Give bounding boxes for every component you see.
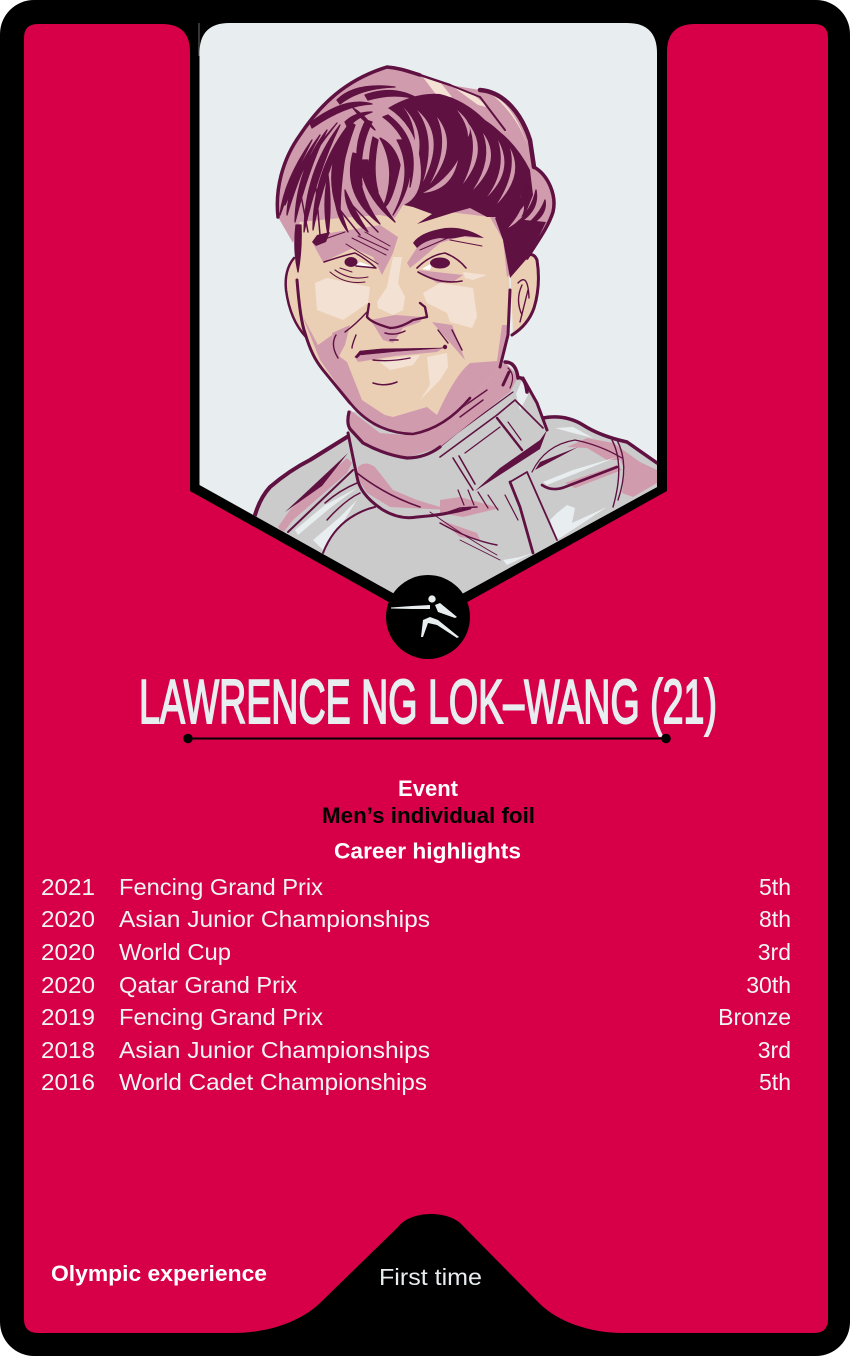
career highlights table: 2020: [41, 906, 95, 932]
right eyebrow: [413, 228, 484, 248]
neck and collar: [348, 362, 527, 458]
career highlights table: 5th: [759, 874, 791, 900]
event heading: Event: [398, 776, 459, 801]
career highlights table: Bronze: [718, 1004, 791, 1030]
face shading: [302, 316, 384, 428]
hair: [277, 67, 554, 278]
career highlights table: Fencing Grand Prix: [119, 874, 324, 900]
career highlights heading: Career highlights: [334, 838, 521, 864]
career highlights table: 2018: [41, 1037, 95, 1063]
hair dark mass: [388, 94, 533, 225]
fencer figure: [391, 595, 459, 638]
career highlights table: 3rd: [758, 939, 791, 965]
event name: Men’s individual foil: [322, 803, 535, 828]
career highlights table: World Cup: [119, 939, 231, 965]
career highlights table: 2016: [41, 1069, 95, 1095]
career highlights table: Fencing Grand Prix: [119, 1004, 324, 1030]
career highlights table: 2020: [41, 972, 95, 998]
smile lines: [333, 312, 462, 358]
portrait illustration: [230, 67, 657, 620]
icon: fencer badge: [386, 575, 470, 659]
left eyebrow: [312, 232, 330, 246]
ear: [286, 253, 539, 337]
hair light slivers: [403, 103, 524, 228]
career highlights table: 2021: [41, 874, 95, 900]
left eye: [324, 253, 377, 283]
career highlights table: 3rd: [758, 1037, 791, 1063]
career highlights table: Qatar Grand Prix: [119, 972, 298, 998]
career highlights table: [41, 874, 791, 1095]
career highlights table: 8th: [759, 906, 791, 932]
nose: [367, 303, 427, 328]
career highlights table: 30th: [746, 972, 791, 998]
olympic experience value: First time: [379, 1264, 482, 1290]
hair strands: [280, 86, 545, 272]
face outline: [297, 280, 350, 403]
suit lines: [255, 437, 347, 515]
portrait panel: [199, 23, 657, 620]
career highlights table: 2020: [41, 939, 95, 965]
face: [297, 190, 510, 435]
olympic experience label: Olympic experience: [51, 1261, 267, 1286]
career highlights table: Asian Junior Championships: [119, 1037, 430, 1063]
career highlights table: 2019: [41, 1004, 95, 1030]
career highlights table: World Cadet Championships: [119, 1069, 427, 1095]
fencing suit: [253, 364, 657, 594]
right eye: [417, 253, 466, 282]
career highlights table: Asian Junior Championships: [119, 906, 430, 932]
mouth: [355, 348, 443, 358]
career highlights table: 5th: [759, 1069, 791, 1095]
title underline: [183, 734, 671, 743]
hair outline: [277, 67, 420, 217]
